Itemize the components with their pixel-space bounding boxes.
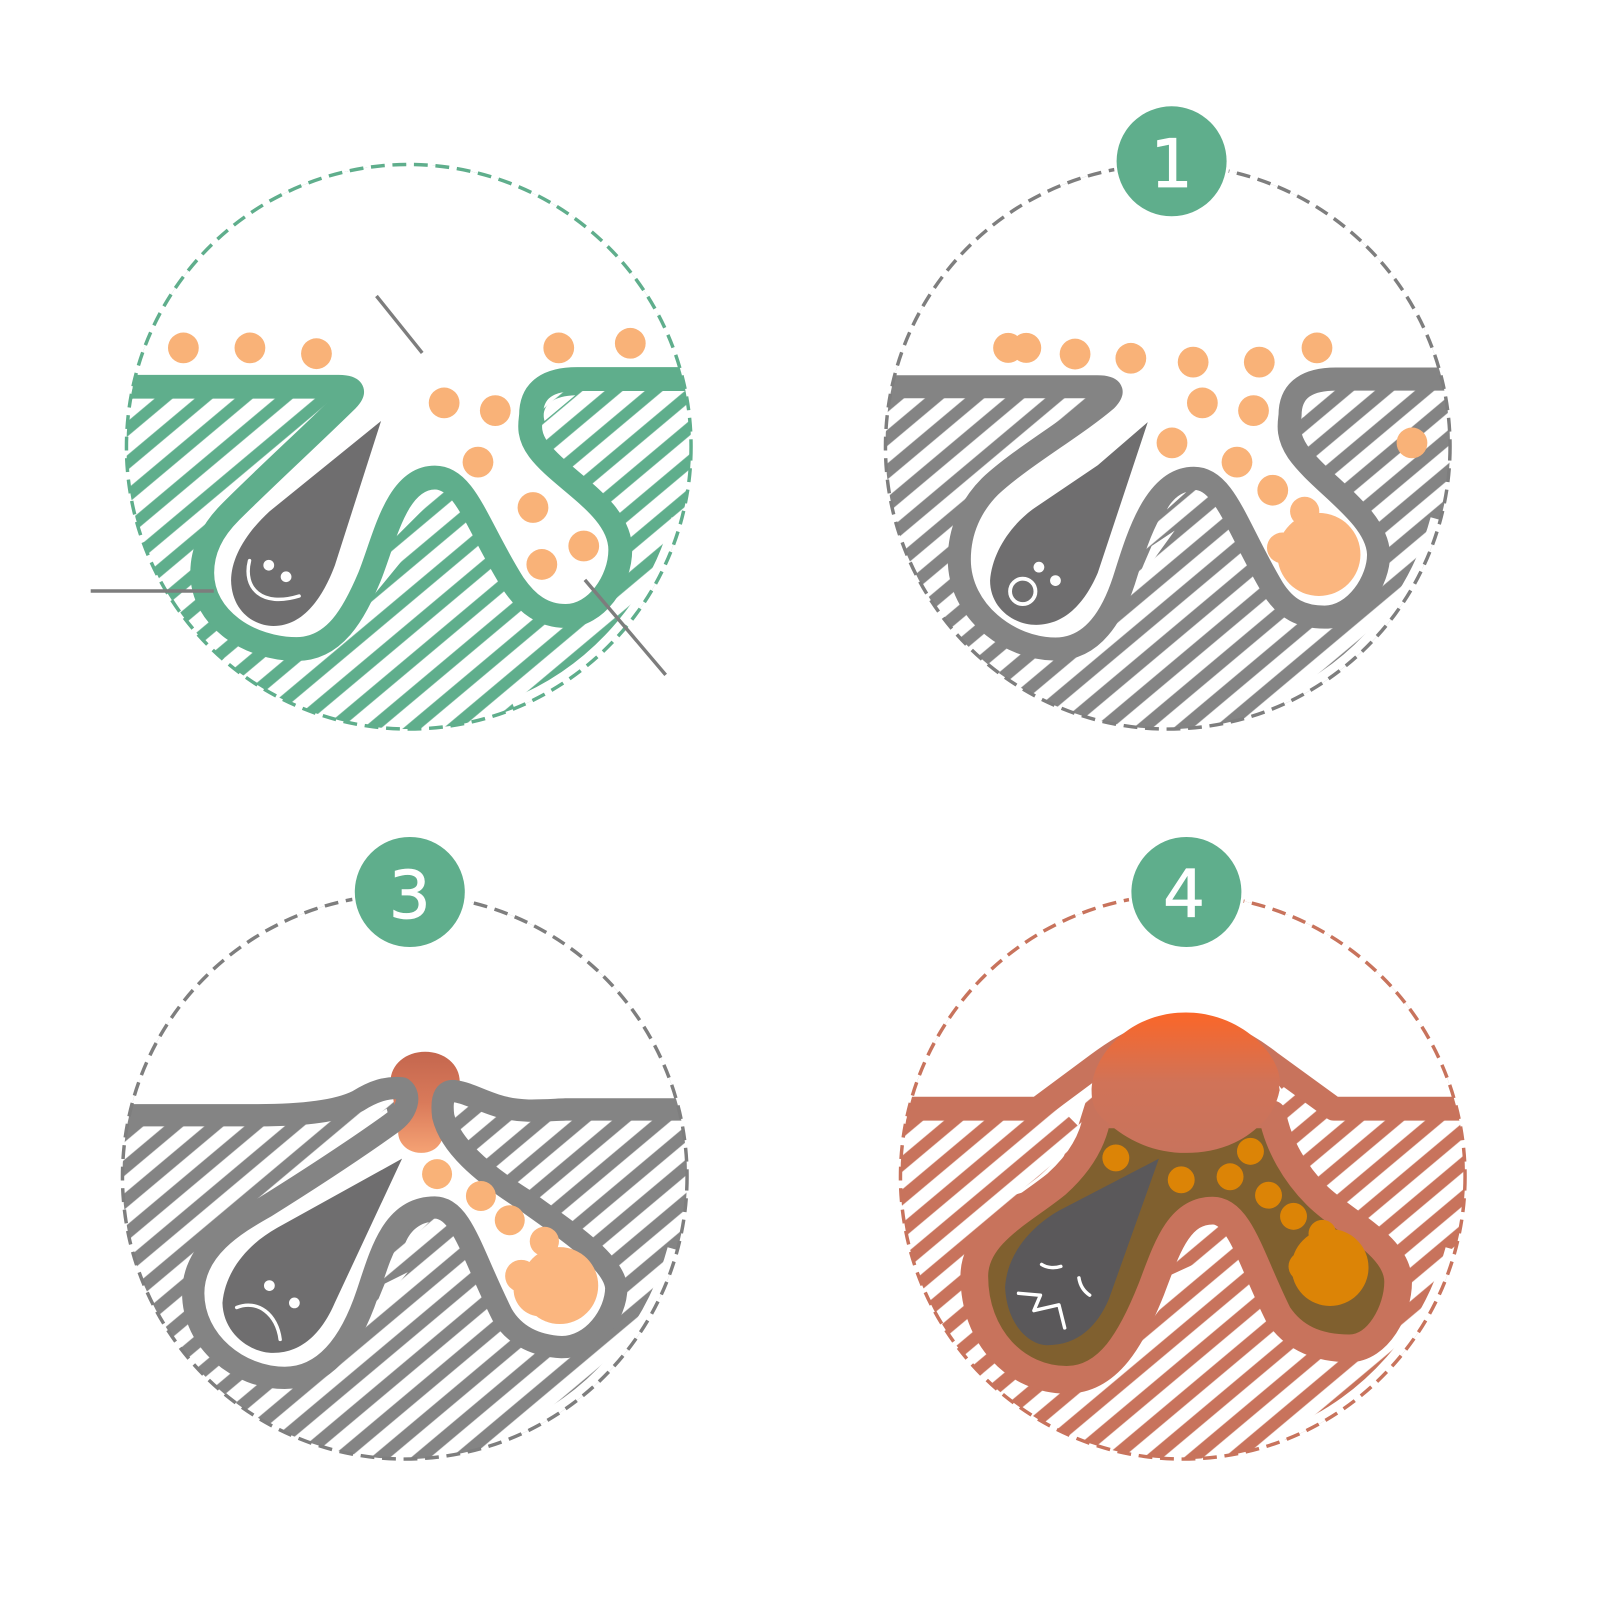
follicle wall outline	[96, 1088, 719, 1378]
bacteria dots	[168, 328, 646, 580]
panel: healthy follicle	[90, 162, 693, 731]
dashed outline	[122, 894, 687, 1459]
bacteria dots	[1102, 1138, 1307, 1230]
badge: number 4	[1128, 834, 1244, 950]
small gap	[1279, 1086, 1290, 1104]
icon: happy sebum drop	[231, 421, 381, 626]
badge: number 3	[352, 834, 468, 950]
skin and follicle wall	[122, 902, 687, 1459]
sebum blob	[1267, 497, 1360, 596]
skin and follicle wall	[886, 172, 1450, 729]
dashed outline	[126, 164, 691, 729]
pustule head	[391, 1052, 460, 1153]
skin and follicle wall	[126, 164, 691, 729]
panel: stage 3	[120, 898, 689, 1461]
badge: number 4: 4	[1163, 856, 1205, 933]
dashed outline	[885, 164, 1450, 729]
sebum blob	[1289, 1220, 1369, 1306]
bacteria dots	[993, 333, 1427, 506]
skin band	[900, 902, 1465, 1459]
badge: number 1: 1	[1150, 125, 1193, 203]
icon: sad sebum drop	[222, 1159, 402, 1353]
sebum blob	[505, 1227, 598, 1324]
badge: number 1	[1114, 103, 1230, 219]
label leader lines	[91, 296, 666, 675]
swollen dome	[1092, 1013, 1280, 1153]
inflamed follicle	[974, 1114, 1398, 1380]
badge: number 3: 3	[389, 857, 431, 934]
dashed outline	[900, 894, 1465, 1459]
icon: pained sebum drop	[1005, 1159, 1159, 1345]
panel: stage 4	[898, 898, 1467, 1461]
bacteria dots	[422, 1159, 525, 1235]
panel: stage 1	[884, 168, 1452, 731]
icon: surprised sebum drop	[990, 422, 1148, 625]
